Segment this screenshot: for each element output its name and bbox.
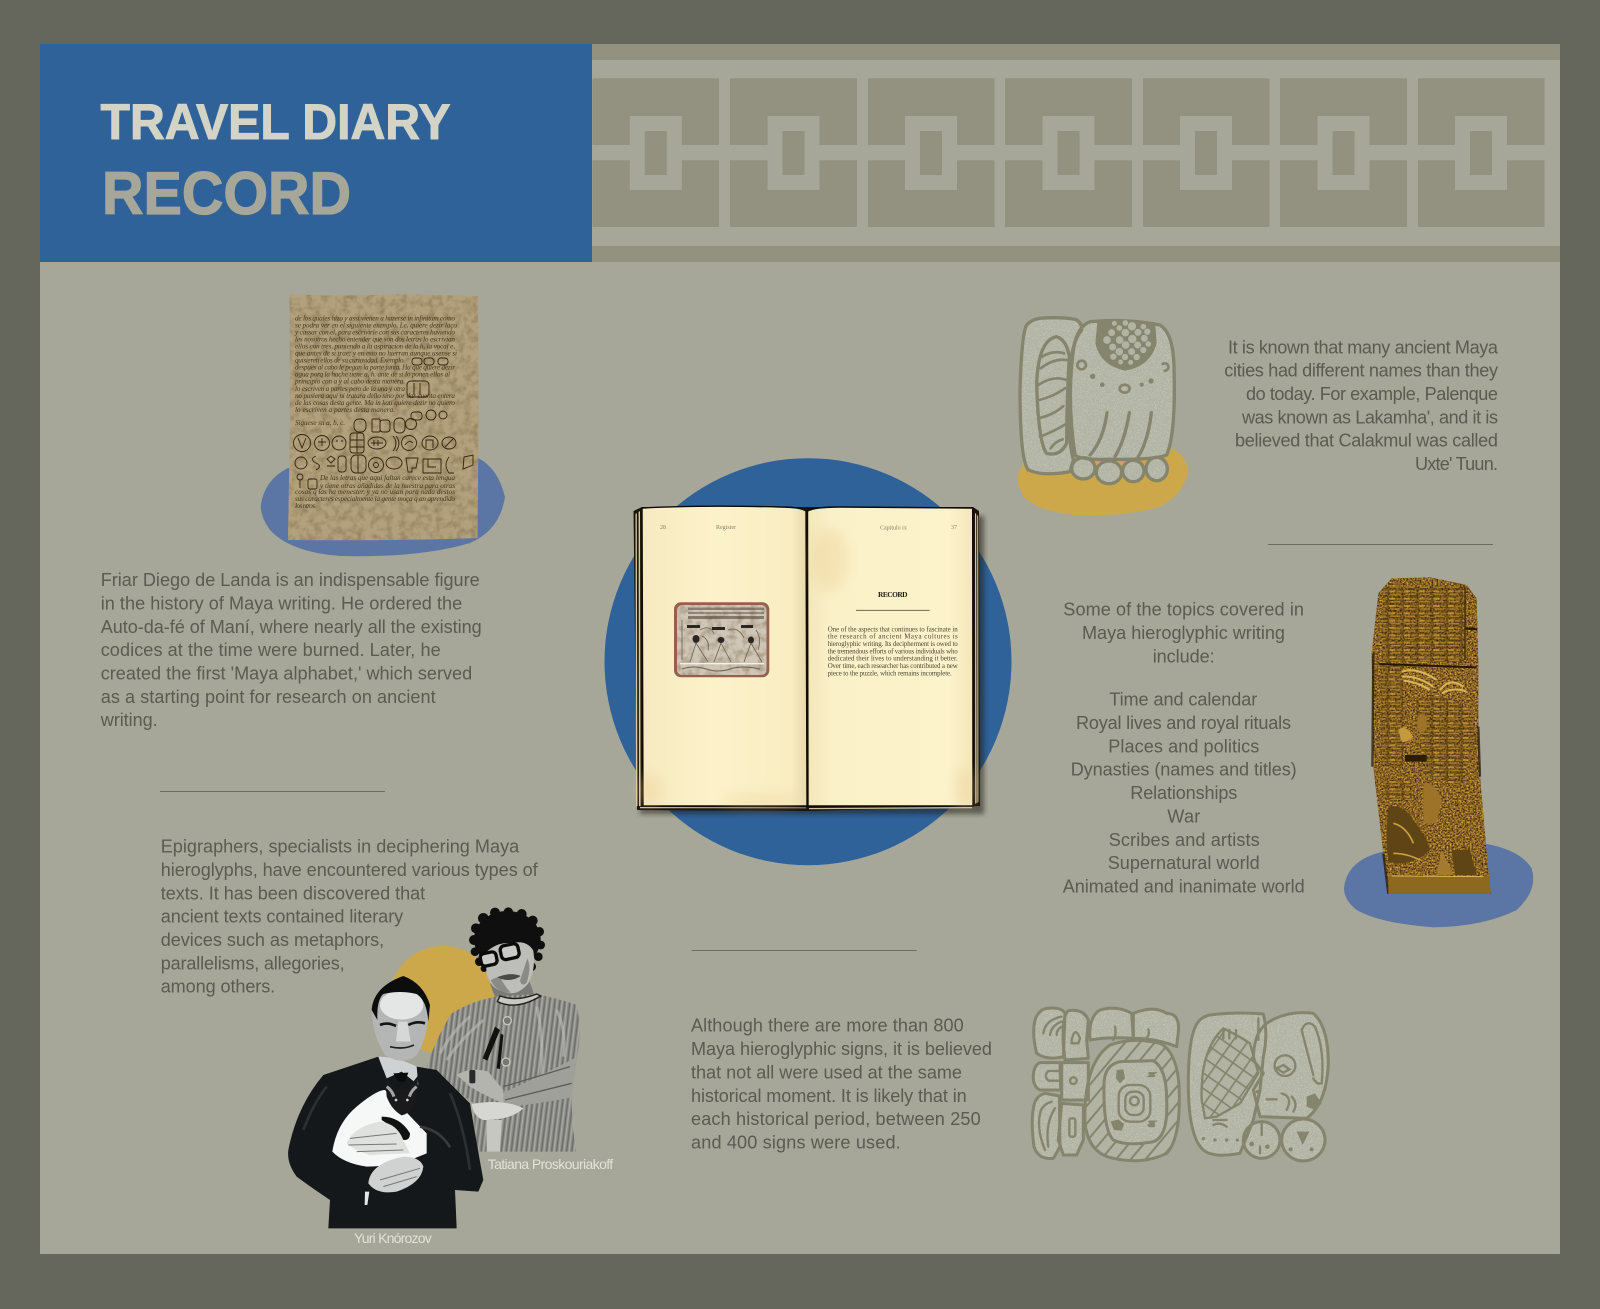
manuscript handwriting: lo escriven a partes desta manera. <box>295 406 395 414</box>
left hieroglyph marks <box>1039 1017 1154 1150</box>
text: topics list: Places and politics <box>1108 736 1259 756</box>
text: Friar Diego de Landa <box>100 570 482 730</box>
manuscript handwriting <box>294 315 457 510</box>
right page running head: Capitulo ix <box>880 526 907 532</box>
gold circle behind portraits <box>389 946 497 1054</box>
book page text: piece to the puzzle, which remains incomplete. <box>828 670 952 677</box>
text: Epigraphers: parallelisms, allegories, <box>161 953 345 973</box>
book page text: Over time, each researcher has contributed a new <box>828 663 958 670</box>
book cover and page stacks <box>634 507 980 811</box>
right page running head: 37 <box>951 525 957 531</box>
manuscript handwriting: sus caracteres especialmente la gente moça q an aprendido <box>295 495 455 503</box>
text: ancient city names: Uxte' Tuun. <box>1415 454 1498 474</box>
manuscript handwriting: les nosotros hecho entender que son dos letras lo escrivian <box>295 336 455 344</box>
text: Friar Diego de Landa: as a starting point for research on ancient <box>101 687 436 707</box>
right hieroglyph marks <box>1213 1018 1322 1153</box>
left page running head: Register <box>716 525 736 531</box>
manuscript handwriting: quisieren ellos de su curiosidad. Exemplo. <box>295 357 405 365</box>
text: Friar Diego de Landa: writing. <box>100 710 158 730</box>
text: topics list: Animated and inanimate world <box>1063 877 1305 897</box>
manuscript handwriting: De las letras que aqui faltan carece esta lengua <box>319 474 455 482</box>
pair of maya hieroglyphs <box>1032 1008 1328 1161</box>
stela carved figure <box>1387 670 1490 894</box>
text: topics list: War <box>1167 806 1200 826</box>
manuscript handwriting: ellos con tres, puniendo a la aspiracion de la h, la vocal e, <box>295 343 455 351</box>
text: Epigraphers: hieroglyphs, have encountered various types of <box>161 860 539 880</box>
manuscript paper <box>288 294 478 540</box>
title: travel diary: TRAVEL DIARY <box>100 93 450 150</box>
book page text: the tremendous efforts of various individuals who <box>828 648 958 655</box>
Tatiana hair <box>469 907 545 972</box>
book page rule <box>856 609 930 611</box>
text: Epigraphers: ancient texts contained literary <box>161 907 404 927</box>
manuscript handwriting: que antes de si trae; y en esto no hierran aunque usense si <box>295 350 457 358</box>
book page text: the research of ancient Maya cultures is <box>828 634 958 641</box>
caption: Tatiana Proskouriakoff: Tatiana Proskouriakoff <box>488 1156 613 1172</box>
text: topics list: Relationships <box>1130 783 1237 803</box>
left hieroglyph fills <box>1032 1008 1179 1159</box>
blue blob behind manuscript <box>261 458 505 556</box>
text: topics list: Maya hieroglyphic writing <box>1082 623 1285 643</box>
stela stone <box>1372 577 1491 894</box>
blue blob <box>1344 844 1533 927</box>
manuscript hand-drawn glyphs <box>294 358 473 489</box>
header band <box>40 44 1560 262</box>
text: Friar Diego de Landa: Friar Diego de Landa is an indispensable figure <box>101 570 480 590</box>
left page <box>642 506 807 806</box>
text: Epigraphers: texts. It has been discovered that <box>161 883 425 903</box>
text: Friar Diego de Landa: Auto-da-fé of Maní, where nearly all the existing <box>101 617 482 637</box>
text: Friar Diego de Landa: codices at the time were burned. Later, he <box>101 640 441 660</box>
book page text: dedicated their lives to understanding it better. <box>828 656 958 663</box>
glyph dome dots <box>1104 321 1151 364</box>
manuscript handwriting: y tiene otras añadidas de la nuestra para otras <box>319 482 455 490</box>
book page text <box>828 626 958 677</box>
portrait: Yuri Knorozov with cat <box>288 976 483 1228</box>
text: topics list: include: <box>1153 646 1215 666</box>
text: hieroglyphic signs: historical moment. It is likely that in <box>691 1086 967 1106</box>
manuscript handwriting: principio con a y al cabo desta manera. <box>294 378 405 386</box>
text: topics list: Time and calendar <box>1109 690 1257 710</box>
glyph body <box>1020 318 1174 484</box>
glyph dots <box>1090 320 1157 387</box>
manuscript handwriting: de las cosas desta gente. Ma in kati quiere dezir no quiero <box>295 399 455 407</box>
glyph outlines <box>1020 318 1174 484</box>
text: hieroglyphic signs: each historical period, between 250 <box>691 1109 981 1129</box>
text: topics list: Dynasties (names and titles) <box>1071 760 1297 780</box>
portraits of epigraphers <box>288 907 613 1246</box>
right hieroglyph fills <box>1188 1013 1328 1161</box>
text: topics list: Royal lives and royal rituals <box>1076 713 1291 733</box>
book page text: hieroglyphic writing. Its decipherment is owed to <box>828 641 958 648</box>
manuscript handwriting: se podra ver en el siguiente exemplo. Le, quiere dezir laço <box>295 322 457 330</box>
left hieroglyph hatched ring <box>1085 1040 1179 1161</box>
portrait: Tatiana Proskouriakoff <box>427 907 580 1152</box>
page stains <box>638 528 975 808</box>
text: Epigraphers: Epigraphers, specialists in deciphering Maya <box>161 837 520 857</box>
blue circle <box>604 458 1012 865</box>
maya fret frieze <box>592 44 1560 262</box>
manuscript page with blue blob <box>261 294 505 556</box>
manuscript handwriting: agua porq la hache tiene a, h. ante de si lo ponen ellos al <box>295 371 450 379</box>
title block <box>40 44 592 262</box>
right page <box>808 507 973 806</box>
text: hieroglyphic signs: Although there are more than 800 <box>691 1016 964 1036</box>
text: hieroglyphic signs: that not all were used at the same <box>691 1062 962 1082</box>
left page running head: 28 <box>660 525 666 531</box>
text: ancient city names: It is known that many ancient Maya <box>1228 337 1499 357</box>
right hieroglyph solid marks <box>1202 1090 1322 1151</box>
text: topics list <box>1063 600 1305 897</box>
text: ancient city names: cities had different names than they <box>1224 361 1499 381</box>
caption: Yuri Knorozov: Yuri Knórozov <box>354 1230 432 1246</box>
manuscript handwriting: y cassar con el, para escrivirle con sus caracteres haviendo <box>294 329 455 337</box>
gold blob <box>1017 447 1188 515</box>
text: Epigraphers: among others. <box>161 977 275 997</box>
left page running head <box>660 525 736 531</box>
manuscript handwriting: despues al cabo le pegan la parte junta. Ha que quiere dezir <box>295 364 455 372</box>
book page heading: RECORD <box>878 590 908 599</box>
book shadow <box>640 516 984 814</box>
left hieroglyph centre <box>1104 1061 1167 1144</box>
text: hieroglyphic signs <box>691 1016 992 1153</box>
text: topics list: Some of the topics covered in <box>1063 600 1304 620</box>
manuscript handwriting: de los quales hizo y assi vienen a hazerse in infinitum como <box>295 315 455 323</box>
text: ancient city names: do today. For example, Palenque <box>1246 384 1498 404</box>
text: Friar Diego de Landa: in the history of Maya writing. He ordered the <box>101 593 462 613</box>
text: Epigraphers <box>161 837 539 997</box>
text: hieroglyphic signs: and 400 signs were used. <box>691 1133 901 1153</box>
manuscript handwriting: los ntros <box>295 502 315 510</box>
glyph inner marks <box>1038 352 1168 457</box>
right hieroglyph outlines <box>1188 1013 1328 1161</box>
text: ancient city names: believed that Calakmul was called <box>1235 431 1498 451</box>
right page running head <box>880 525 957 532</box>
manuscript handwriting: cosas q las ha menester, y ya no usan para nada destos <box>295 488 455 496</box>
text: topics list: Supernatural world <box>1108 853 1260 873</box>
central open book with blue circle <box>604 458 1012 865</box>
text: ancient city names: was known as Lakamha', and it is <box>1241 407 1498 427</box>
text: topics list: Scribes and artists <box>1109 830 1260 850</box>
codex illustration <box>674 602 769 677</box>
title: record: RECORD <box>102 160 351 227</box>
stela carved inscription panel <box>1372 587 1480 894</box>
manuscript handwriting: no pusiera aqui ni tratara dello sino por dar cuenta entera <box>295 392 455 400</box>
left hieroglyph outlines <box>1032 1008 1179 1159</box>
stela with blue blob <box>1344 577 1533 927</box>
manuscript handwriting: Siguese su a, b, c. <box>295 419 345 427</box>
calendar glyph with gold blob <box>1017 318 1188 515</box>
text: hieroglyphic signs: Maya hieroglyphic signs, it is believed <box>691 1039 992 1059</box>
left hieroglyph solid marks <box>1111 1069 1125 1131</box>
right hieroglyph net <box>1202 1028 1258 1118</box>
text: Epigraphers: devices such as metaphors, <box>161 930 384 950</box>
book page text: One of the aspects that continues to fascinate in <box>828 626 958 633</box>
text: Friar Diego de Landa: created the first 'Maya alphabet,' which served <box>101 664 472 684</box>
manuscript handwriting: lo escriven a partes pero de la una y otra <box>295 385 405 393</box>
text: ancient city names <box>1224 337 1499 474</box>
